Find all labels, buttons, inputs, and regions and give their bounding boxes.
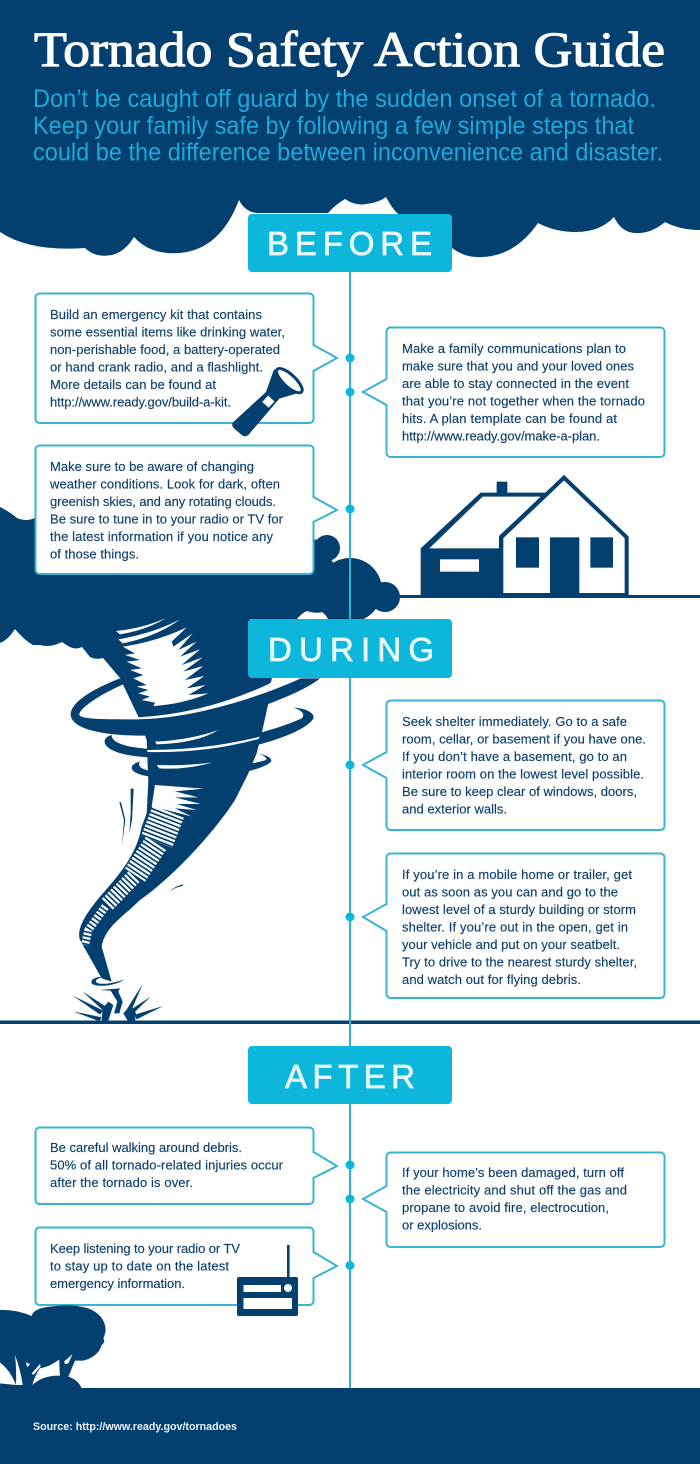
panel: weather conditions: of those things. [50,546,139,562]
front gable [501,478,627,595]
lower swirl highlight [152,785,203,817]
ground line upper [385,595,700,598]
lower comb highlights [85,812,168,945]
panel: communications plan: that you’re not together when the tornado [402,394,645,408]
panel: mobile home: your vehicle and put on your seatbelt. [402,937,620,952]
panel: mobile home: If you’re in a mobile home or trailer, get [402,867,632,882]
panel: emergency kit: More details can be found at [50,377,216,392]
panel: weather conditions: weather conditions. Look for dark, often [49,476,280,492]
upper swirl highlight [116,618,208,706]
panel: communications plan: make sure that you and your loved ones [402,358,634,374]
main ring [71,678,320,736]
panel: emergency kit: or hand crank radio, and a flashlight. [50,360,263,374]
left wing roof and wall [421,493,547,597]
left wing window [440,559,479,572]
panel: seek shelter: If you don’t have a basement, go to an [402,749,627,764]
panel: utilities: or explosions. [402,1218,482,1232]
panel: mobile home: lowest level of a sturdy building or storm [402,902,636,917]
trees [0,1305,106,1388]
intro text [33,85,663,166]
panel: seek shelter: Be sure to keep clear of windows, doors, [402,784,637,799]
white gaps in the body [147,730,260,752]
house illustration [421,478,627,597]
left front window [516,537,539,568]
before label: BEFORE [267,225,432,262]
panel: debris warning [36,1128,337,1204]
panel: emergency kit: Build an emergency kit that contains [50,307,262,322]
panel: mobile home: Try to drive to the nearest sturdy shelter, [402,954,637,970]
door [550,537,579,596]
title: Tornado Safety Action Guide [34,21,665,77]
left roof face [429,497,541,548]
ground line lower [0,1020,700,1024]
panel: debris warning: after the tornado is over. [50,1175,193,1190]
after label: AFTER [285,1058,415,1095]
intro text: Don’t be caught off guard by the sudden onset of a tornado. [33,85,656,113]
panel: debris warning: Be careful walking around debris. [50,1140,242,1155]
panel: weather conditions: Make sure to be aware of changing [50,459,254,474]
before label [248,214,452,272]
panel: seek shelter: Seek shelter immediately. Go to a safe [402,714,627,729]
panel: weather conditions: greenish skies, and any rotating clouds. [50,494,276,509]
panel: mobile home [363,854,664,998]
tornado illustration [71,618,320,1022]
panel: emergency kit: some essential items like drinking water, [50,324,285,340]
panel: seek shelter: interior room on the lowest level possible. [402,766,644,782]
panel: seek shelter: room, cellar, or basement if you have one. [402,732,646,746]
timeline [349,272,351,1388]
intro text: could be the difference between inconvenience and disaster. [33,138,663,166]
chimney [497,482,507,495]
cloud gap above during label [297,611,328,619]
tornado body [79,667,273,982]
panel: mobile home: shelter. If you’re out in the open, get in [402,920,628,934]
panel: seek shelter: and exterior walls. [402,802,507,816]
panel: utilities: propane to avoid fire, electrocution, [402,1200,609,1215]
panel: emergency kit: non-perishable food, a battery-operated [50,342,280,357]
during label: DURING [268,631,434,668]
panel: utilities [363,1152,664,1247]
panel: emergency kit [36,294,337,423]
panel: keep listening [36,1228,337,1305]
white streak between rings [157,762,213,769]
panel: communications plan: are able to stay connected in the event [402,376,629,391]
panel: debris warning: 50% of all tornado-related injuries occur [50,1158,284,1172]
panel: utilities: If your home’s been damaged, turn off [402,1165,624,1180]
after label [248,1046,452,1104]
panel: utilities: the electricity and shut off the gas and [402,1182,627,1198]
icon: radio [237,1245,298,1316]
panel: communications plan: hits. A plan template can be found at [402,411,617,426]
panel: keep listening: emergency information. [50,1276,185,1291]
panel: keep listening: Keep listening to your radio or TV [50,1241,240,1256]
header storm cloud [0,0,700,257]
panel: communications plan: Make a family communications plan to [402,341,626,356]
panel: mobile home: out as soon as you can and go to the [402,884,618,900]
panel: keep listening: to stay up to date on the latest [50,1258,229,1274]
right front window [590,537,613,568]
panel: weather conditions: Be sure to tune in to your radio or TV for [50,512,284,526]
during label [248,619,452,678]
panel: mobile home: and watch out for flying debris. [402,972,581,987]
footer band [0,1388,700,1464]
panel: seek shelter [363,700,664,830]
source text: Source: http://www.ready.gov/tornadoes [33,1421,237,1433]
second ring [105,708,314,758]
icon: flashlight [232,365,306,436]
third ring [132,754,271,778]
panel: emergency kit: http://www.ready.gov/build-a-kit. [50,394,231,410]
intro text: Keep your family safe by following a few simple steps that [33,112,634,140]
storm cloud above tornado [0,507,400,678]
white gap above main ring [138,678,301,719]
panel: communications plan: http://www.ready.gov/make-a-plan. [402,428,600,444]
panel: weather conditions: the latest information if you notice any [50,529,274,544]
panel: communications plan [363,328,664,457]
ground contact swirl and impact spikes [73,977,163,1022]
flying debris marks [119,789,183,892]
timeline dots [346,354,354,1270]
panel: weather conditions [36,446,337,574]
